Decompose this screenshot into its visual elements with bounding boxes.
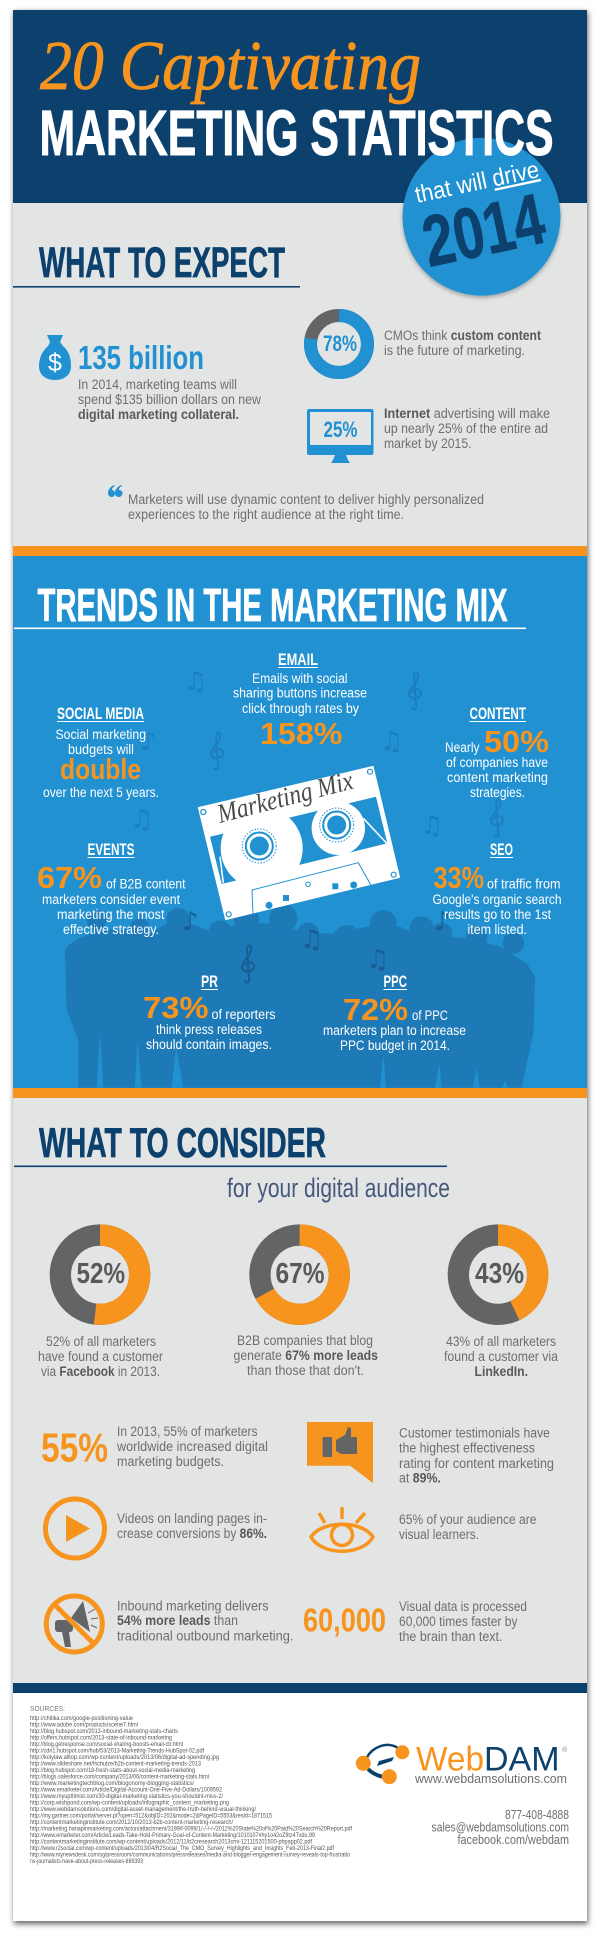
stat: events: EVENTS (88, 840, 134, 859)
stat: social media: over the next 5 years. (43, 785, 159, 800)
text: customer testimonials: the highest effectiveness (399, 1440, 535, 1456)
badge: that will drive 2014: 2014 (416, 179, 552, 283)
stat: ppc: 72% (343, 992, 408, 1027)
text: customer testimonials: rating for content marketing (399, 1456, 554, 1471)
text: videos: Videos on landing pages in- (117, 1511, 267, 1526)
icons: music notes: ♪ (182, 907, 199, 937)
text: inbound marketing (117, 1598, 294, 1644)
text: custom content (384, 328, 541, 358)
stat: pr: PR (201, 972, 218, 991)
sources list: http://www.webdamsolutions.com/digital-asset-management/the-truth-behind-visual-thinking/ (30, 1806, 256, 1813)
stat: 55%: 55% (41, 1424, 108, 1470)
stat: 60,000: 60,000 (303, 1602, 386, 1638)
caption: linkedin: 43% of all marketers (446, 1334, 556, 1349)
caption: linkedin: found a customer via (444, 1349, 558, 1364)
stat: email: Emails with social (252, 671, 348, 686)
badge: that will drive 2014: that will drive (413, 156, 541, 209)
donut chart: 78% (310, 316, 368, 372)
donut chart: 52% (60, 1235, 140, 1314)
sources list: http://www.mynewsdesk.com/sg/pressroom/communications/pressreleases/media-and-blogger-engagement-survey-reveals-top-frustratio (30, 1852, 350, 1858)
text: visual data: 60,000 times faster by (399, 1614, 518, 1629)
icon: play button (46, 1499, 104, 1558)
text: inbound marketing: traditional outbound marketing. (117, 1628, 294, 1644)
icons: music notes: ♪ (434, 907, 451, 937)
panel: trends in the marketing mix (13, 556, 587, 1088)
stat: 135 billion: 135 billion (78, 339, 204, 376)
stat: content (445, 704, 549, 800)
text: visual data: Visual data is processed (399, 1599, 527, 1614)
sources list: http://my.gartner.com/portal/server.pt?open=512&objID=202&mode=2&PageID=5553&resId=1871515 (30, 1812, 272, 1820)
caption: blog leads: B2B companies that blog (237, 1333, 373, 1348)
stat: events: marketing the most (57, 907, 165, 922)
logo: WebDAM (356, 1740, 568, 1786)
sources list: http://blog.hubspot.com/2013-inbound-marketing-stats-charts (30, 1728, 178, 1735)
illustration: cassette tape (199, 765, 399, 919)
text: internet advertising (384, 406, 550, 451)
caption: linkedin: LinkedIn. (474, 1364, 528, 1379)
contact details: facebook.com/webdam (458, 1832, 569, 1847)
donut chart: 78%: 78% (323, 331, 357, 356)
stat: email (233, 650, 367, 751)
sources list: http://www.slideshare.net/fschulze/b2b-content-marketing-trends-2013 (30, 1760, 201, 1768)
icon: eye (311, 1507, 373, 1551)
sources list: http://cdn1.hubspot.com/hub/53/2013-Marketing-Trends-HubSpot-02.pdf (30, 1748, 204, 1754)
stat: social media: Social marketing (56, 727, 146, 742)
logo: WebDAM: Web (416, 1740, 484, 1778)
text: quote: experiences to the right audience at the right time. (128, 507, 404, 522)
heading: what to consider: WHAT TO CONSIDER (39, 1119, 326, 1166)
stat: pr: 73% (143, 990, 208, 1025)
icons: music notes: ♫ (380, 727, 403, 757)
sources list: http://www.r2social.com/wp-content/uploads/2013/04/R2Social_The_CMO_Survey_Highlights_and_Insights_Feb-2013-Final2.pdf (30, 1845, 334, 1852)
stat: ppc (323, 972, 466, 1053)
stat: seo: of traffic from (487, 876, 560, 892)
contact details (432, 1807, 569, 1847)
stat: seo: Google's organic search (432, 892, 562, 907)
caption: facebook: 52% of all marketers (46, 1334, 156, 1349)
text: visual data (399, 1599, 527, 1644)
subheading: for your digital audience: for your digital audience (227, 1173, 450, 1203)
stat: content: CONTENT (470, 704, 526, 723)
sources list: http://kolylaw.alltop.com/wp-content/uploads/2013/06/digital-ad-spending.jpg (30, 1754, 219, 1761)
stat: 135 billion: In 2014, marketing teams will (78, 377, 237, 392)
stat: content: Nearly (445, 740, 480, 755)
text: inbound marketing: Inbound marketing delivers (117, 1598, 269, 1614)
stat: content: content marketing (447, 770, 548, 785)
stat: pr (143, 972, 276, 1052)
stat: pr: think press releases (156, 1022, 262, 1037)
icons: music notes: ♫ (366, 945, 389, 975)
stat: email: 158% (260, 716, 342, 751)
sources list: http://blog.getresponse.com/social-sharing-boosts-email-ctr.html (30, 1741, 183, 1748)
sources list (30, 1704, 352, 1865)
stat: seo: results go to the 1st (444, 907, 551, 922)
contact details: 877-408-4888 (505, 1807, 569, 1822)
sources list: http://www.emarketer.com/Article/Digital-Account-One-Five-Ad-Dollars/1009592 (30, 1786, 222, 1794)
stat: pr: should contain images. (146, 1037, 272, 1052)
sources list: http://blog.hubspot.com/18-fresh-stats-about-social-media-marketing (30, 1767, 195, 1774)
panel: what to consider (13, 1098, 587, 1683)
panel: header (13, 10, 587, 203)
sources list: http://offers.hubspot.com/2013-state-of-inbound-marketing (30, 1734, 172, 1742)
icons: music notes: ♪ (140, 727, 157, 757)
icon: no megaphone (46, 1596, 102, 1652)
stat: social media (43, 704, 159, 800)
icons: music notes (130, 667, 503, 982)
icons: music notes: ♫ (300, 925, 323, 955)
stat: events (37, 840, 186, 937)
caption: facebook (38, 1334, 163, 1379)
stat: email: EMAIL (278, 650, 318, 669)
text: visual learners (399, 1512, 536, 1542)
stat: events: marketers consider event (42, 892, 180, 907)
text: visual learners: visual learners. (399, 1527, 479, 1542)
sources list: http://contentmarketinginstitute.com/2012/10/2013-b2b-content-marketing-research/ (30, 1819, 233, 1826)
text: videos (117, 1511, 267, 1541)
text: videos: crease conversions by 86%. (117, 1526, 267, 1541)
stat: ppc: PPC budget in 2014. (340, 1038, 450, 1053)
icon: monitor 25%: 25% (324, 417, 358, 442)
sources list: http://blogs.salesforce.com/company/2013/06/content-marketing-stats.html (30, 1774, 209, 1780)
cassette label: Marketing Mix: Marketing Mix (213, 765, 356, 829)
stat: social media: budgets will (68, 742, 134, 757)
icon: thumbs up speech bubble (307, 1422, 373, 1483)
stat: content: of companies have (446, 755, 548, 770)
caption: facebook: via Facebook in 2013. (41, 1364, 160, 1379)
text: quote (128, 492, 484, 522)
heading: what to expect: WHAT TO EXPECT (39, 239, 285, 287)
icon: quote mark (108, 485, 122, 497)
donut chart: 43%: 43% (475, 1258, 524, 1290)
panel: footer (13, 1693, 587, 1921)
sources list: http://www.marketingtechblog.com/blogonomy-blogging-statistics/ (30, 1780, 194, 1787)
stat: events: effective strategy. (63, 922, 159, 937)
sources list: http://marketing.hanapinmarketing.com/acton/attachment/3199/f-0099/1/-/-/-/-/2012%20State%20of%20Paid%20Search%20Report.pdf (30, 1826, 352, 1832)
stat: social media: double (60, 754, 141, 786)
donut chart: 52%: 52% (76, 1258, 125, 1290)
icon: monitor 25% (307, 409, 374, 463)
badge: that will drive 2014 (402, 138, 560, 296)
stat: ppc: of PPC (412, 1008, 448, 1023)
title script: 20 Captivating: 20 Captivating (40, 28, 421, 105)
caption: facebook: have found a customer (38, 1349, 163, 1364)
donut chart: 67%: 67% (276, 1258, 325, 1290)
icon: money bag: $ (48, 349, 62, 377)
stat: 135 billion: digital marketing collateral. (78, 407, 239, 422)
sources list: http://www.emarketer.com/Article/Leads-Take-Hold-Primary-Goal-of-Content-Marketing/1010107#hy1o42oZ9tz4Txdu.99 (30, 1832, 315, 1839)
caption: blog leads: than those that don't. (247, 1363, 364, 1378)
logo: WebDAM: www.webdamsolutions.com (414, 1771, 567, 1786)
caption: linkedin (444, 1334, 558, 1379)
text: visual data: the brain than text. (399, 1629, 502, 1644)
contact details: sales@webdamsolutions.com (432, 1820, 569, 1834)
stat: seo: item listed. (468, 922, 527, 937)
illustration: crowd silhouette (65, 904, 535, 1088)
stat: pr: of reporters (212, 1007, 276, 1022)
sources list: http://www.myupttimist.com/30-digital-marketing-statistics-you-shouldnt-miss-2/ (30, 1793, 223, 1800)
text: customer testimonials (399, 1426, 554, 1486)
footer band (13, 1683, 587, 1693)
stat: 55%: worldwide increased digital (116, 1439, 268, 1454)
text: internet advertising: Internet advertising will make (384, 406, 550, 421)
caption: blog leads (234, 1333, 378, 1378)
text: custom content: CMOs think custom content (384, 328, 541, 343)
text: custom content: is the future of marketing. (384, 343, 525, 358)
sources list: SOURCES: (30, 1704, 65, 1713)
text: visual learners: 65% of your audience are (399, 1512, 536, 1527)
icon: money bag (39, 335, 71, 380)
sources list: http://www.adobe.com/products/scene7.html (30, 1722, 138, 1728)
donut chart: 67% (260, 1235, 339, 1314)
logo: WebDAM: ® (562, 1746, 568, 1754)
stat: 135 billion: spend $135 billion dollars on new (78, 392, 261, 407)
donut chart: 43% (458, 1235, 538, 1314)
sources list: http://chitika.com/google-positioning-value (30, 1715, 133, 1722)
stat: content: strategies. (470, 785, 525, 800)
stat: events: of B2B content (106, 876, 186, 892)
caption: blog leads: generate 67% more leads (234, 1348, 378, 1363)
stat: ppc: PPC (384, 972, 407, 991)
text: customer testimonials: Customer testimonials have (399, 1426, 550, 1440)
logo: WebDAM: DAM (484, 1740, 560, 1778)
sources list: ns-journalists-have-about-press-releases-889393 (30, 1858, 143, 1865)
icons: music notes: ♫ (184, 667, 207, 697)
stat: 55% (41, 1424, 268, 1470)
stat: 55%: marketing budgets. (117, 1454, 224, 1469)
stat: 55%: In 2013, 55% of marketers (117, 1424, 258, 1439)
text: customer testimonials: at 89%. (399, 1470, 441, 1486)
stat: social media: SOCIAL MEDIA (57, 704, 144, 723)
panel: what to expect (13, 203, 587, 546)
stat: email: sharing buttons increase (233, 686, 367, 700)
stat: content: 50% (484, 724, 549, 759)
stat: seo: 33% (434, 860, 484, 895)
text: inbound marketing: 54% more leads than (117, 1613, 238, 1628)
stat: email: click through rates by (242, 701, 359, 716)
text: internet advertising: market by 2015. (384, 436, 472, 451)
divider: orange band top (13, 546, 587, 556)
stat: seo (432, 840, 562, 937)
stat: events: 67% (37, 860, 102, 895)
text: quote: Marketers will use dynamic content to deliver highly personalized (128, 492, 484, 507)
sources list: http://contentmarketinginstitute.com/wp-content/uploads/2012/11/b2cresearch2013cmi-121115201500-phpapp02.pdf (30, 1838, 312, 1846)
stat: 135 billion (78, 339, 261, 422)
text: internet advertising: up nearly 25% of the entire ad (384, 421, 548, 436)
sources list: http://corp.wishpond.com/wp-content/uploads/infographic_content_marketing.png (30, 1800, 229, 1806)
icons: music notes: ♫ (420, 811, 443, 841)
divider: orange band bottom (13, 1088, 587, 1098)
stat: seo: SEO (490, 840, 513, 859)
icons: music notes: ♫ (130, 805, 153, 835)
stat: ppc: marketers plan to increase (323, 1023, 466, 1038)
